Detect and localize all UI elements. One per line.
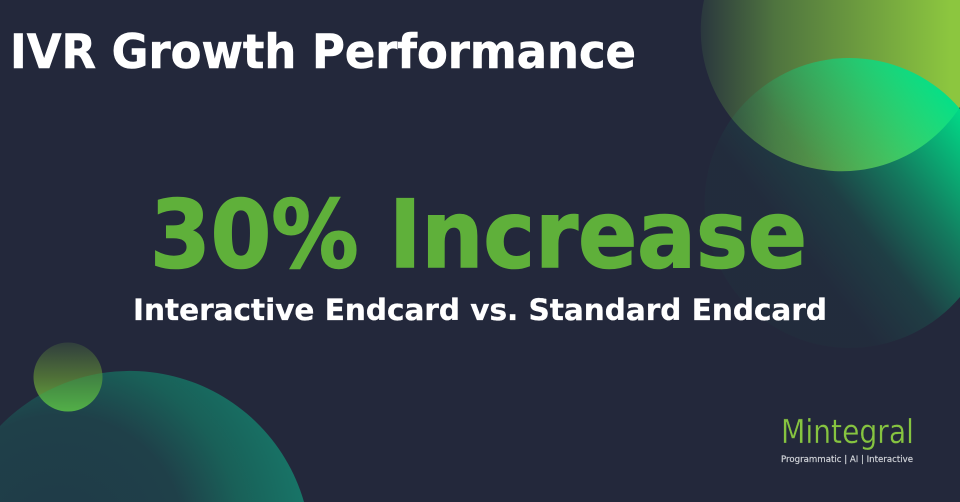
decorative circle: teal right — [705, 58, 960, 348]
logo wordmark: Mintegral — [781, 412, 914, 451]
title: IVR Growth Performance — [10, 25, 636, 80]
logo: Mintegral — [781, 412, 914, 465]
subtitle: Interactive Endcard vs. Standard Endcard — [133, 293, 827, 327]
decorative circle: lime top right — [701, 0, 960, 171]
decorative circle: teal bottom left — [0, 371, 304, 502]
decorative circle: small green — [34, 342, 102, 412]
headline statistic: 30% Increase — [150, 181, 807, 290]
logo tagline: Programmatic | AI | Interactive — [781, 455, 913, 465]
